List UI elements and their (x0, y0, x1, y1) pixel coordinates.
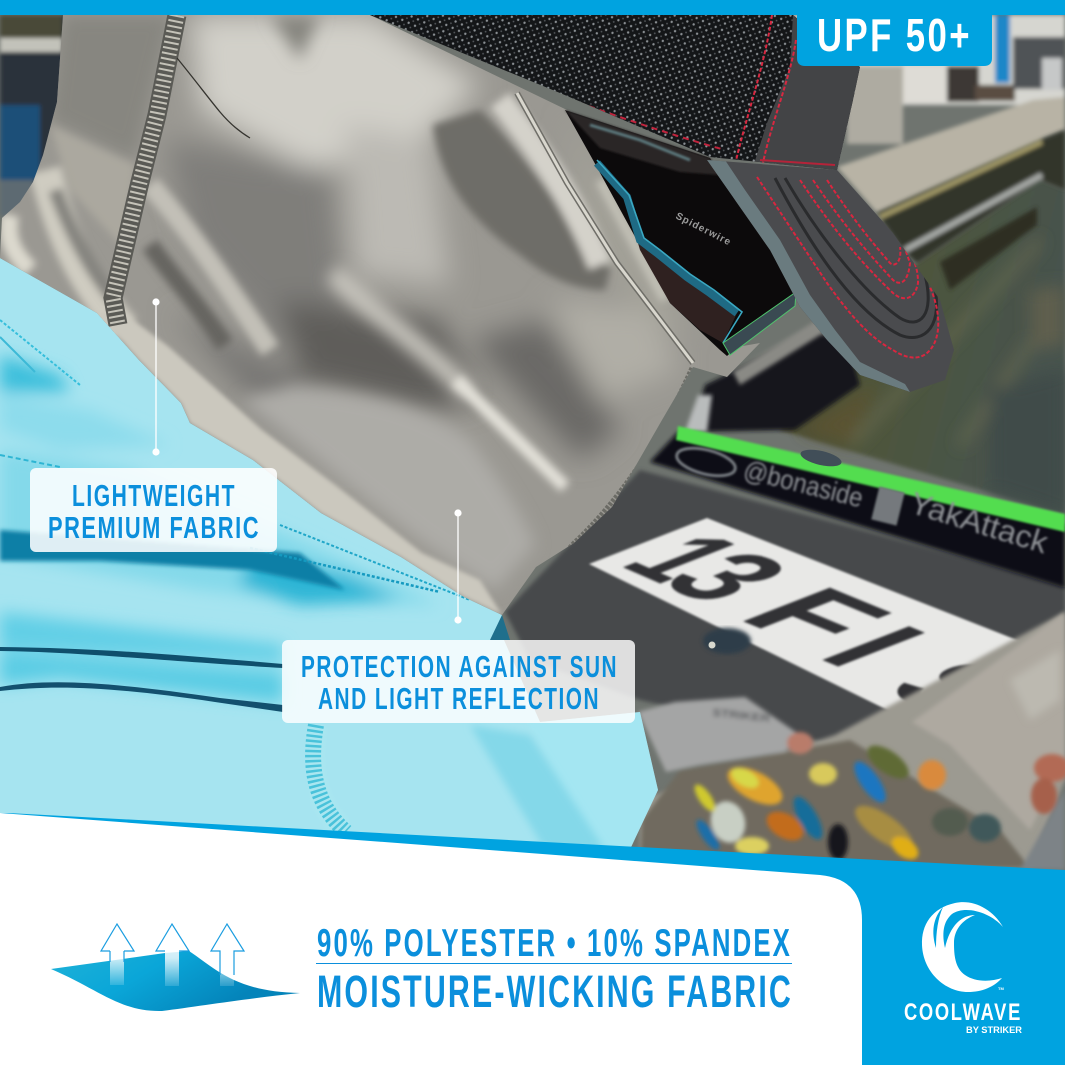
badge: UPF 50+: UPF 50+ (817, 9, 972, 61)
button on stripe (799, 446, 843, 470)
white deck mat with 13 FISHING: F (708, 574, 923, 659)
callout leader: sun protection (454, 509, 462, 624)
sponsor names (674, 443, 1052, 560)
arrow 3 (211, 924, 244, 986)
shirt stitch (313, 725, 346, 832)
white deck mat with 13 FISHING: 1 (590, 521, 775, 595)
heading: fabric composition (316, 922, 793, 1017)
fabric swatch (51, 951, 300, 1011)
logo: Coolwave by Striker: COOLWAVE (904, 999, 1022, 1026)
sunglasses and face: Spiderwire (674, 211, 732, 248)
cap mesh crown (370, 15, 860, 170)
white deck mat with 13 FISHING (589, 518, 1065, 735)
bottom panel: blue band (0, 813, 1065, 1065)
heading: fabric composition: 90% POLYESTER • 10% SPANDEX (317, 922, 792, 965)
callout: protection against sun: PROTECTION AGAINST SUN (301, 649, 618, 684)
logo wave mark (922, 902, 1003, 992)
deck snap (703, 628, 751, 654)
white deck mat with 13 FISHING: I (788, 613, 959, 680)
sunglasses and face (565, 110, 796, 356)
logo: Coolwave by Striker: TM (998, 986, 1004, 991)
top bar (0, 0, 1065, 15)
callout: lightweight premium fabric (30, 468, 277, 552)
arrow 1 (101, 924, 134, 985)
shirt: light blue (0, 250, 670, 870)
gaiter: gray neck fabric (0, 0, 780, 630)
right hand (1020, 754, 1065, 870)
green gunwale stripe (676, 426, 1065, 532)
gloved hand (638, 697, 813, 772)
white deck mat with 13 FISHING: 3 (630, 538, 824, 616)
callout: protection against sun: AND LIGHT REFLECTION (318, 681, 600, 716)
tackle box with lures (640, 612, 1065, 868)
callout: lightweight premium fabric: PREMIUM FABRIC (48, 510, 260, 545)
lures (691, 739, 1001, 864)
sponsor names: YakAttack (906, 485, 1052, 560)
bottom panel: white card (0, 813, 862, 1065)
boat deck (505, 426, 1065, 745)
black gunwale band (650, 432, 1065, 588)
callout leader: lightweight fabric (152, 298, 160, 456)
logo: Coolwave by Striker (904, 902, 1022, 1036)
logo: Coolwave by Striker: BY STRIKER (966, 1025, 1022, 1036)
sponsor names: @bonaside (741, 455, 866, 513)
arrow 2 (156, 924, 189, 986)
gloved hand: STRIKER (712, 707, 771, 725)
callout: protection against sun (282, 640, 635, 723)
seam (113, 15, 177, 325)
sleeve shadow at collar (490, 615, 510, 640)
cap brim (707, 160, 954, 392)
icon: moisture-wicking fabric with arrows (51, 924, 300, 1011)
heading: fabric composition: MOISTURE-WICKING FABRIC (317, 966, 793, 1017)
callout: lightweight premium fabric: LIGHTWEIGHT (72, 478, 236, 513)
